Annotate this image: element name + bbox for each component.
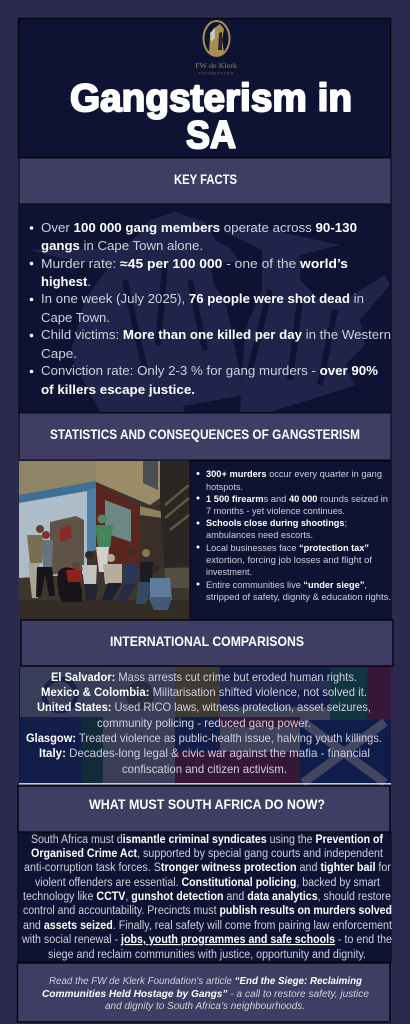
panel: statistics bullets: 300+ murders occur every quarter in gang	[206, 469, 382, 480]
panel: statistics bullets	[190, 461, 391, 620]
list: key facts bullets: of killers escape justice.	[41, 383, 195, 397]
heading: main title: SA	[186, 114, 236, 157]
text: comparison list	[26, 670, 382, 776]
illustration: faded national flags	[20, 667, 391, 783]
panel: statistics bullets: investment.	[206, 567, 252, 578]
panel: title	[18, 18, 390, 158]
panel: key facts	[19, 204, 391, 413]
heading: key facts	[19, 158, 391, 204]
heading: statistics and consequences	[19, 413, 391, 460]
panel: statistics bullets: stripped of safety, dignity & education rights.	[206, 592, 391, 603]
list: key facts bullets: Over 100 000 gang members operate across 90-130	[41, 221, 357, 235]
panel: statistics bullets: hotspots.	[206, 482, 243, 493]
list: key facts bullets	[30, 221, 391, 397]
heading: key facts: KEY FACTS	[174, 172, 237, 187]
text: recommendations: violent offenders are essential. Constitutional policing, backed by smart	[35, 877, 381, 889]
callout: read the article	[18, 963, 390, 1022]
panel: statistics bullets: Local businesses face “protection tax”	[206, 543, 369, 554]
illustration: gangster silhouettes	[30, 212, 390, 412]
text: recommendations	[21, 834, 393, 961]
text: comparison list: Italy: Decades-long legal & civic war against the mafia - financial	[39, 746, 370, 760]
text: comparison list: United States: Used RICO laws, witness protection, asset seizures,	[37, 700, 371, 714]
heading: what must South Africa do now: WHAT MUST SOUTH AFRICA DO NOW?	[89, 797, 325, 812]
panel: what must South Africa do	[18, 832, 393, 962]
icon: FW de Klerk Foundation logo	[195, 21, 238, 76]
icon: FW de Klerk Foundation logo: FW de Klerk	[195, 62, 238, 70]
list: key facts bullets: Cape Town.	[41, 311, 110, 325]
panel: statistics bullets: ambulances need escorts.	[206, 530, 313, 541]
text: comparison list: community policing - reduced gang power.	[97, 716, 311, 730]
callout: read the article: and dignity to South Africa’s neighbourhoods.	[105, 1001, 305, 1012]
list: key facts bullets: In one week (July 2025), 76 people were shot dead in	[41, 292, 364, 306]
text: recommendations: and assets seized. Finally, real safety will come from pairing law enforcement	[23, 920, 393, 932]
list: key facts bullets: gangs in Cape Town alone.	[41, 239, 203, 253]
callout: read the article: Communities Held Hostage by Gangs” - a call to restore safety, justice	[42, 989, 369, 1000]
heading: international comparisons: INTERNATIONAL COMPARISONS	[110, 634, 304, 649]
text: recommendations: with social renewal - jobs, youth programmes and safe schools - to end the	[21, 934, 392, 946]
callout: read the article: Read the FW de Klerk Foundation’s article “End the Siege: Reclaiming	[49, 976, 362, 987]
panel: international comparisons	[19, 667, 391, 784]
heading: main title	[70, 77, 352, 157]
text: recommendations: South Africa must dismantle criminal syndicates using the Prevention of	[31, 834, 383, 846]
icon: FW de Klerk Foundation logo: FOUNDATION	[199, 72, 233, 76]
panel: statistics bullets: 7 months - yet violence continues.	[206, 506, 345, 517]
panel: statistics bullets: Entire communities live “under siege”,	[206, 580, 367, 591]
list: key facts bullets: Child victims: More than one killed per day in the Western	[41, 328, 391, 342]
list: key facts bullets: highest.	[41, 275, 91, 289]
text: recommendations: siege and reclaim communities with justice, opportunity and dignity.	[48, 949, 366, 961]
heading: what must South Africa do now	[18, 786, 390, 832]
list: key facts bullets: Cape.	[41, 347, 77, 361]
panel: statistics bullets: extortion, forcing job losses and flight of	[206, 555, 372, 566]
text: comparison list: Mexico & Colombia: Militarisation shifted violence, not solved it.	[41, 685, 367, 699]
text: comparison list: El Salvador: Mass arrests cut crime but eroded human rights.	[51, 670, 357, 684]
text: recommendations: technology like CCTV, gunshot detection and data analytics, should restore	[23, 891, 391, 903]
heading: statistics and consequences: STATISTICS AND CONSEQUENCES OF GANGSTERISM	[50, 427, 360, 442]
heading: main title: Gangsterism in	[70, 77, 352, 120]
heading: international comparisons	[21, 620, 393, 666]
people	[27, 514, 172, 610]
list: key facts bullets: Conviction rate: Only 2-3 % for gang murders - over 90%	[41, 364, 378, 378]
panel: statistics bullets: Schools close during shootings;	[206, 518, 347, 529]
text: recommendations: control and accountability. Precincts must publish results on murders solved	[23, 905, 392, 917]
text: comparison list: confiscation and citizen activism.	[122, 762, 287, 776]
list: key facts bullets: Murder rate: ≈45 per 100 000 - one of the world’s	[41, 257, 348, 271]
text: comparison list: Glasgow: Treated violence as public-health issue, halving youth killings.	[26, 731, 382, 745]
panel: statistics bullets: 1 500 firearms and 40 000 rounds seized in	[206, 494, 388, 505]
text: recommendations: Organised Crime Act, supported by special gang courts and independent	[31, 848, 384, 860]
image: gang members on a street corner	[19, 461, 189, 619]
text: recommendations: anti-corruption task forces. Stronger witness protection and tighter bail for	[24, 862, 391, 874]
